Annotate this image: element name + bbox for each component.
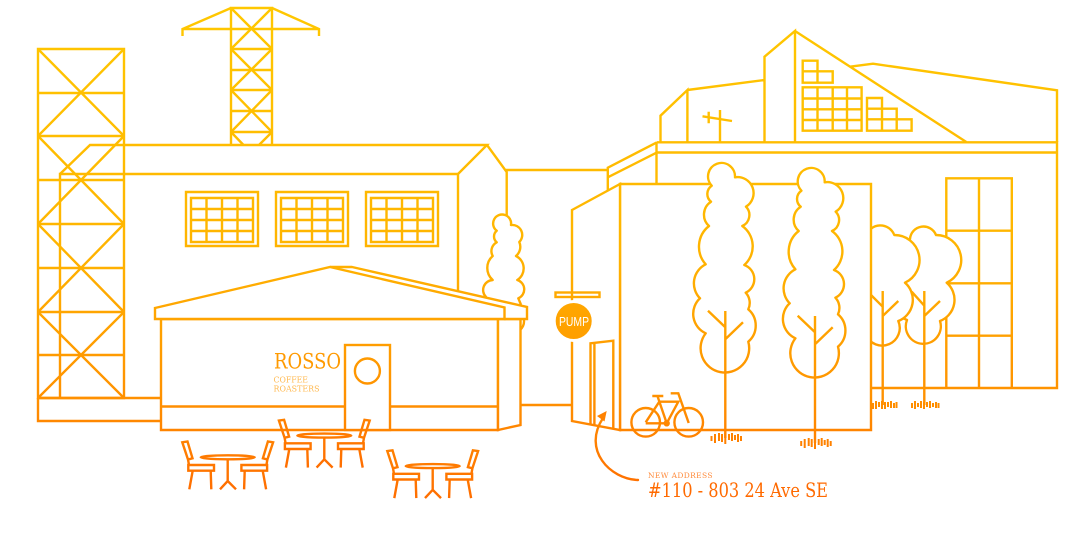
small tree behind Rosso [483,215,524,330]
background tree right [895,227,961,405]
scaffold tower [38,49,124,398]
address text: #110 - 803 24 Ave SE [648,478,828,502]
Rosso sign: ROSSO [274,350,341,374]
pump sign: PUMP [559,314,589,329]
warehouse window 2 [276,192,348,246]
crane [182,8,319,145]
front tree 1 [693,163,756,444]
upper roofline [660,31,966,142]
cafe table set 2 [279,420,370,468]
main warehouse building [38,145,608,421]
warehouse window 1 [186,192,258,246]
rooftop antenna [702,110,732,142]
cafe table set 3 [387,450,478,498]
grass tuft [712,433,741,444]
Rosso sign [274,350,341,394]
arrow to door [596,411,638,480]
front building [620,184,871,430]
pump door [590,341,613,429]
stair window [867,98,912,131]
background tree left [866,225,920,405]
bicycle [631,393,703,437]
grass tuft [801,438,831,449]
pump sign [554,292,600,340]
Rosso cafe building [155,267,527,430]
cafe door [345,345,390,430]
grass tufts back [873,401,938,409]
new address label: NEW ADDRESS [648,471,712,480]
Rosso sign: ROASTERS [274,385,320,394]
cafe table set 1 [182,442,273,489]
right building [608,31,1057,388]
connecting ground line [520,404,572,406]
front tree 2 [783,168,845,449]
small stepped window [803,61,833,83]
pump building side wall [572,184,620,430]
large grid window [803,87,862,131]
tall window [946,178,1012,388]
warehouse window 3 [366,192,438,246]
Rosso sign: COFFEE [274,376,308,385]
